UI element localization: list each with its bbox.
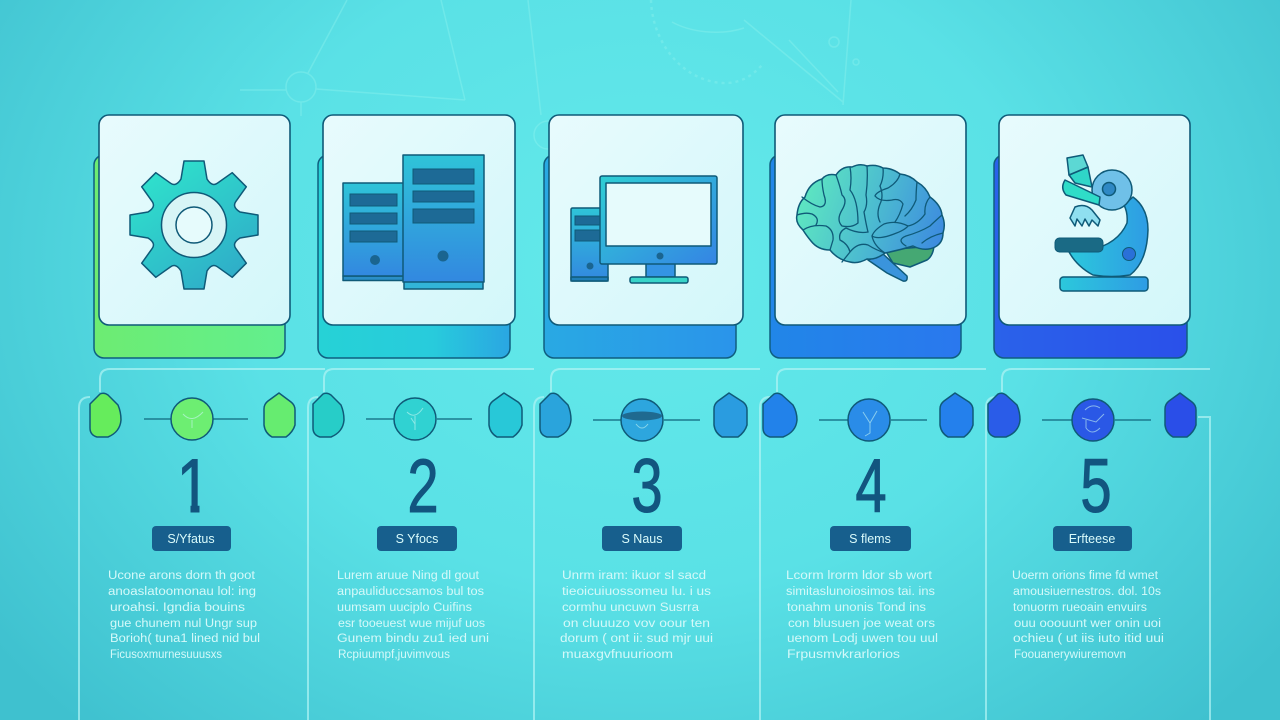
body text 5 — [1012, 570, 1164, 661]
body text 4: tonahm unonis Tond ins — [787, 602, 926, 614]
step 5 — [988, 115, 1196, 661]
label tag 5 — [1053, 526, 1132, 551]
body text 2: Rcpiuumpf,juvimvous — [338, 649, 450, 661]
body text 5: ouu ooouunt wer onin uoi — [1014, 618, 1161, 630]
body text 1: gue chunem nul Ungr sup — [110, 618, 257, 630]
label tag 3: S Naus — [622, 532, 662, 546]
body text 5: tonuorm rueoain envuirs — [1013, 602, 1147, 614]
number 5: 5 — [1080, 444, 1112, 529]
step 4 — [763, 115, 973, 661]
icon: microscope — [1055, 155, 1148, 291]
body text 2: anpauliduccsamos bul tos — [337, 586, 484, 598]
panel outlines — [79, 369, 1210, 720]
body text 3: tieoicuiuossomeu lu. i us — [562, 586, 711, 598]
icon: brain — [797, 165, 944, 281]
body text 5: ochieu ( ut iis iuto itid uui — [1013, 633, 1164, 645]
body text 5: Foouanerywiuremovn — [1014, 649, 1126, 661]
label tag 4 — [830, 526, 911, 551]
body text 1: Ficusoxmurnesuuusxs — [110, 649, 222, 661]
body text 1 — [108, 570, 260, 661]
body text 3: cormhu uncuwn Susrra — [562, 602, 700, 614]
connector row 5 — [988, 393, 1196, 441]
body text 4 — [786, 570, 938, 661]
body text 4: simitaslunoiosimos tai. ins — [786, 586, 935, 598]
connector row 2 — [313, 393, 522, 440]
number 4: 4 — [855, 444, 887, 529]
label tag 5: Erfteese — [1069, 532, 1115, 546]
body text 1: Ucone arons dorn th goot — [108, 570, 256, 582]
card stack 5 — [994, 115, 1190, 358]
connector row 3 — [540, 393, 747, 441]
body text 2 — [337, 570, 489, 661]
icon: gear — [130, 161, 258, 289]
step 1 — [90, 115, 295, 661]
body text 5: Uoerm orions fime fd wmet — [1012, 570, 1159, 582]
connector row 4 — [763, 393, 973, 441]
step 2 — [313, 115, 522, 661]
card stack 3 — [544, 115, 743, 358]
number 3: 3 — [631, 444, 663, 529]
connector row 1 — [90, 393, 295, 440]
icon: desktop computer — [571, 176, 717, 283]
step 3 — [540, 115, 747, 661]
body text 4: Lcorm lrorm ldor sb wort — [786, 570, 933, 582]
body text 1: anoaslatoomonau lol: ing — [108, 586, 256, 598]
card stack 4 — [770, 115, 966, 358]
label tag 4: S flems — [849, 532, 891, 546]
label tag 1: S/Yfatus — [167, 532, 215, 546]
number 2: 2 — [407, 444, 439, 529]
body text 3: on cluuuzo vov oour ten — [563, 618, 710, 630]
body text 1: uroahsi. Igndia bouins — [110, 602, 245, 614]
icon: servers — [343, 155, 484, 289]
card stack 2 — [318, 115, 515, 358]
body text 3: dorum ( ont ii: sud mjr uui — [560, 633, 713, 645]
body text 4: con blusuen joe weat ors — [788, 618, 935, 630]
label tag 2 — [377, 526, 457, 551]
body text 3 — [560, 570, 713, 661]
background network decoration — [240, 0, 859, 149]
body text 3: Unrm iram: ikuor sl sacd — [562, 570, 706, 582]
body text 2: esr tooeuest wue mijuf uos — [338, 618, 485, 630]
label tag 3 — [602, 526, 682, 551]
body text 4: Frpusmvkrarlorios — [787, 649, 900, 661]
card stack 1 — [94, 115, 290, 358]
body text 2: Lurem aruue Ning dl gout — [337, 570, 480, 582]
body text 5: amousiuernestros. dol. 10s — [1013, 586, 1161, 598]
number 1: 1 — [177, 444, 210, 529]
body text 2: Gunem bindu zu1 ied uni — [337, 633, 489, 645]
body text 3: muaxgvfnuurioom — [562, 649, 673, 661]
label tag 2: S Yfocs — [396, 532, 438, 546]
body text 4: uenom Lodj uwen tou uul — [787, 633, 938, 645]
body text 1: Borioh( tuna1 lined nid bul — [110, 633, 260, 645]
label tag 1 — [152, 526, 231, 551]
body text 2: uumsam uuciplo Cuifins — [337, 602, 472, 614]
